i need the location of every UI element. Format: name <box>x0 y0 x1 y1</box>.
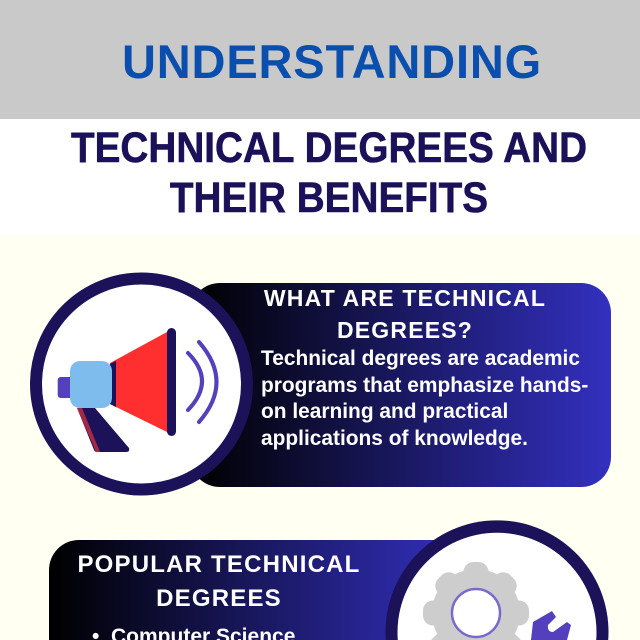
panel: popular technical degrees <box>49 540 469 640</box>
subtitle: THEIR BENEFITS <box>169 174 488 222</box>
heading: popular technical degrees <box>77 551 361 612</box>
heading: what are technical degrees: WHAT ARE TECHNICAL <box>264 285 546 311</box>
heading: popular technical degrees: POPULAR TECHNICAL <box>77 551 361 578</box>
header band <box>0 0 640 119</box>
text: definition <box>261 347 588 450</box>
heading: popular technical degrees: DEGREES <box>156 585 282 612</box>
panel: what are technical degrees <box>190 283 611 487</box>
title: understanding: UNDERSTANDING <box>122 35 542 88</box>
subtitle band <box>0 119 640 234</box>
subtitle: TECHNICAL DEGREES AND <box>70 124 587 172</box>
text: definition: on learning and practical <box>261 400 508 423</box>
subtitle <box>70 124 587 222</box>
heading: what are technical degrees <box>264 285 546 343</box>
icon: gear and wrench <box>386 520 608 640</box>
text: definition: applications of knowledge. <box>261 427 528 450</box>
icon: megaphone <box>30 272 253 496</box>
text: definition: Technical degrees are academic <box>261 347 580 370</box>
text: definition: programs that emphasize hands- <box>261 374 588 397</box>
heading: what are technical degrees: DEGREES? <box>337 317 473 343</box>
